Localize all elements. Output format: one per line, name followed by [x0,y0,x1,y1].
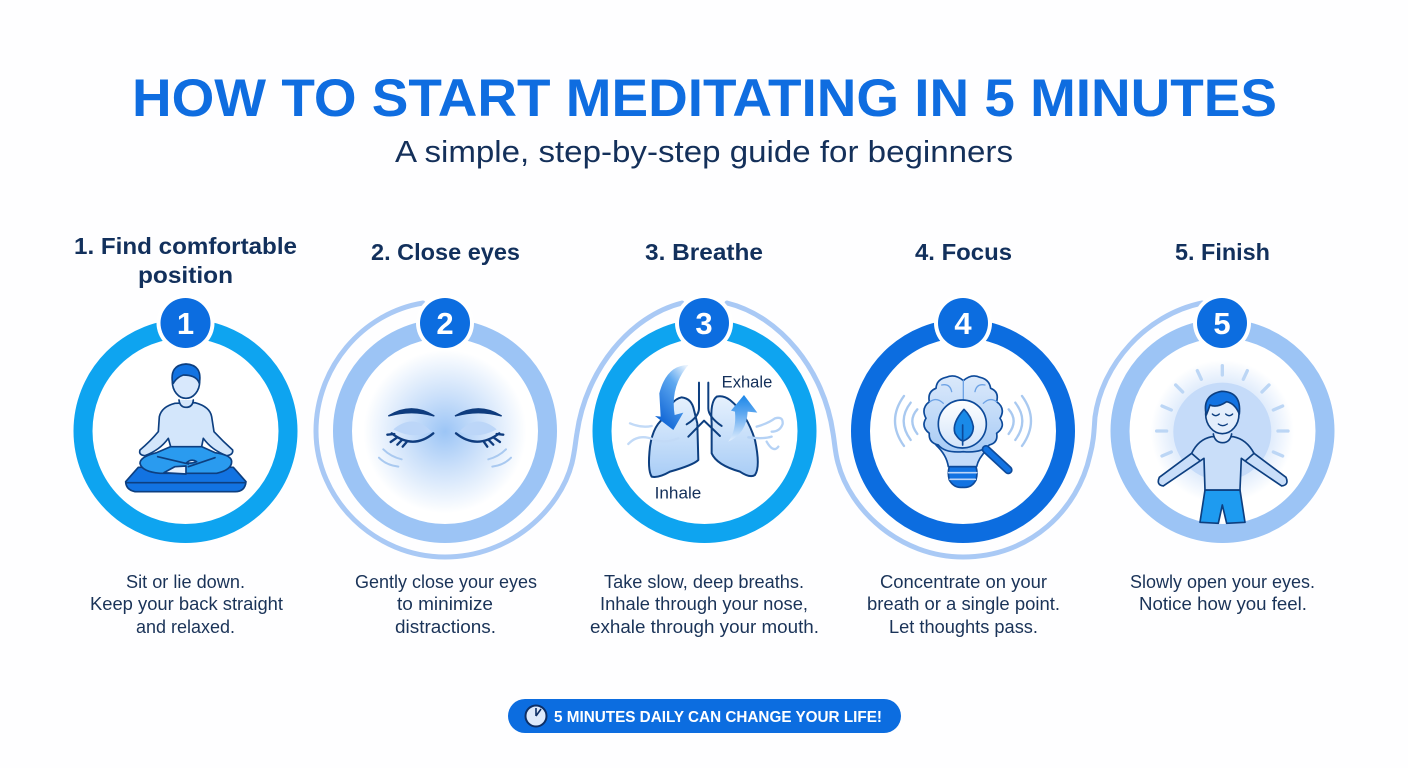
description 4: breath or a single point. [867,594,1060,614]
badge 3 [675,294,733,352]
subtitle: A simple, step-by-step guide for beginners [395,134,1013,169]
badge 5 [1193,294,1251,352]
badge 1 [156,294,214,352]
badge 4: 4 [954,306,972,341]
icon: lungs [628,365,783,502]
description 1: and relaxed. [136,617,235,637]
description 2: to minimize [397,594,493,614]
step 4 [860,239,1066,637]
description 3: exhale through your mouth. [590,617,819,637]
ring 2 [342,328,548,534]
description 4: Let thoughts pass. [889,617,1038,637]
title: HOW TO START MEDITATING IN 5 MINUTES [132,69,1277,128]
description 2: distractions. [395,617,496,637]
heading 3: 3. Breathe [645,239,763,265]
heading 1: position [138,262,233,288]
heading 1 [74,233,297,288]
badge 5: 5 [1213,306,1231,341]
description 5: Notice how you feel. [1139,594,1307,614]
description 4 [867,572,1060,637]
callout pill [508,699,901,733]
ring 3 [602,328,807,534]
icon: closed eyes [363,350,527,513]
icon: clock [526,706,546,726]
step 2 [342,239,548,637]
description 4: Concentrate on your [880,572,1047,592]
badge 2 [416,294,474,352]
badge 3: 3 [695,306,713,341]
icon: relaxed person with glow [1151,360,1294,523]
step 1 [74,233,297,637]
description 3 [590,572,819,637]
badge 4 [934,294,992,352]
step 5 [1120,239,1325,614]
ring 1 [83,328,288,534]
description 3: Take slow, deep breaths. [604,572,804,592]
label: exhale: Exhale [722,373,772,391]
connector wave between steps [316,303,1202,557]
ring 4 [860,328,1066,534]
description 1: Keep your back straight [90,594,283,614]
heading 4: 4. Focus [915,239,1012,265]
description 3: Inhale through your nose, [600,594,808,614]
badge 1: 1 [177,306,194,341]
description 2: Gently close your eyes [355,572,537,592]
callout text: 5 MINUTES DAILY CAN CHANGE YOUR LIFE! [554,709,882,726]
description 1: Sit or lie down. [126,572,245,592]
ring 5 [1120,328,1325,534]
label: inhale: Inhale [655,484,701,502]
description 5: Slowly open your eyes. [1130,572,1315,592]
description 2 [355,572,537,637]
heading 2: 2. Close eyes [371,239,520,265]
icon: brain bulb with magnifier [895,376,1031,487]
description 1 [90,572,283,637]
heading 1: 1. Find comfortable [74,233,297,259]
icon: meditating person [126,364,246,492]
heading 5: 5. Finish [1175,239,1270,265]
description 5 [1130,572,1315,614]
step 3 [590,239,819,637]
badge 2: 2 [436,306,454,341]
